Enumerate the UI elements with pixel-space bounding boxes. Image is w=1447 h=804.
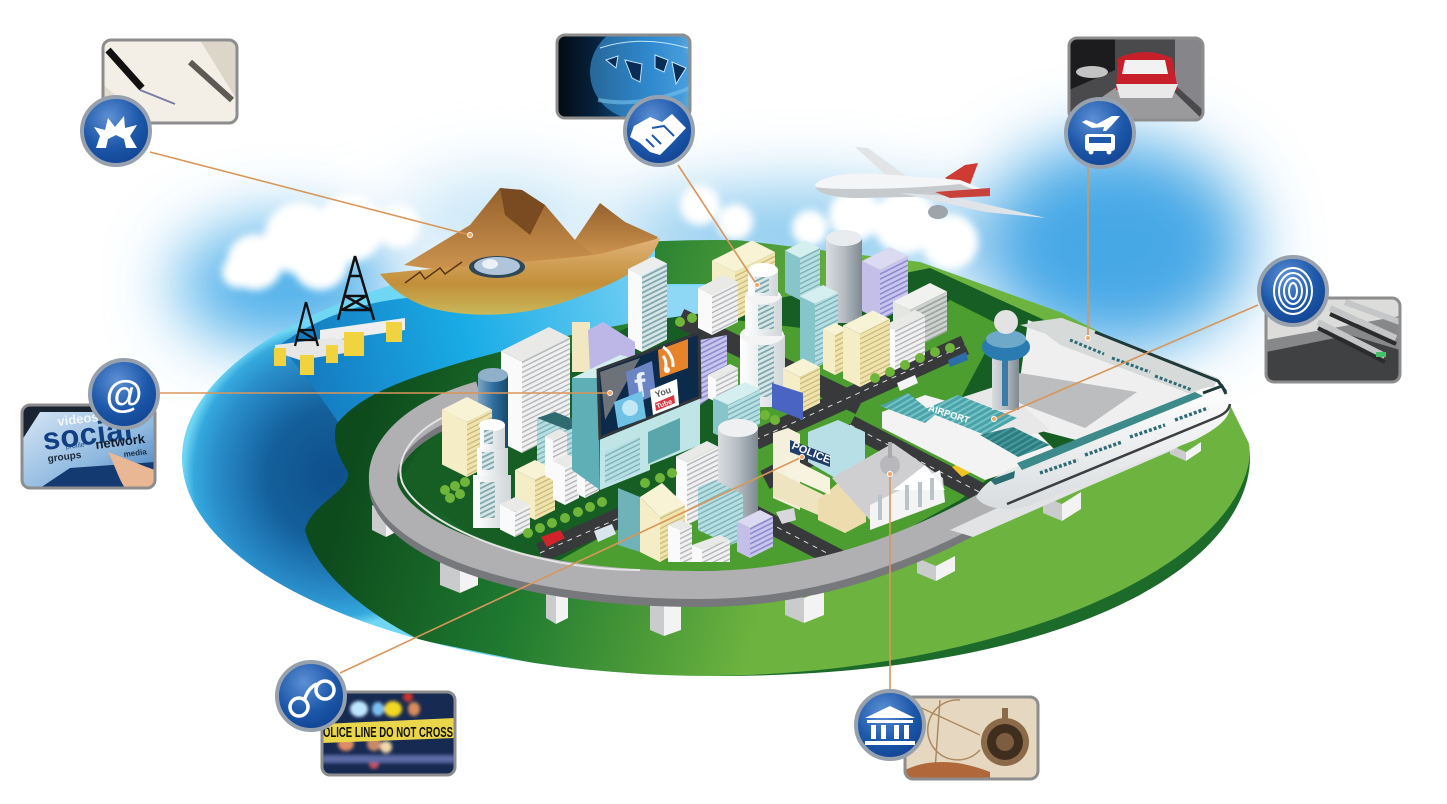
terminal base [882,395,1060,480]
lagoon [281,276,679,422]
connector: social to billboard [160,392,610,394]
thumbnail: compass and clock [905,697,1038,779]
clouds [222,185,978,290]
thumbnail: social network: profile [65,442,85,451]
rear carriages [1030,318,1218,396]
airport and station: AIRPORT [927,403,971,427]
island right rim [716,455,1250,676]
buildings: front block [618,419,773,562]
roads [540,318,985,565]
airport and station [880,310,1220,480]
sky glow behind island [175,140,1250,350]
thumbnail: security gates [1266,298,1400,382]
thumbnail: social network: groups [47,450,82,465]
thumbnail: pen on paper [103,40,237,123]
green landmass [305,240,1250,676]
icon: handshake badge [625,97,693,165]
front body [976,387,1230,509]
thumbnail: police line: OLICE LINE DO NOT CROSS [323,724,453,741]
icon: bank badge [856,691,924,759]
buildings: left block [442,322,635,537]
mountains [380,188,660,315]
icon: explosion badge [82,97,150,165]
icon: handcuffs badge [277,662,345,730]
thumbnail: police line [322,692,455,775]
thumbnail: social network: network [95,431,147,452]
rss tile [658,339,688,378]
cars [541,352,975,547]
twitter tile [614,391,646,428]
lagoon stream [667,285,704,318]
thumbnail: social network: media [123,447,148,459]
thumbnail: social network: social [41,411,134,457]
youtube tile [650,379,679,415]
connector: handcuffs to police [340,457,802,673]
elevated ring road [383,395,1010,593]
connector: handshake to tower [678,165,757,285]
train viaduct underside [950,408,1228,537]
police station: POLICE [790,440,832,466]
icon: at sign badge: @ [105,374,143,416]
museum [832,442,945,530]
city ground [400,268,1190,578]
bullet train [976,318,1230,509]
icon: fingerprint badge [1259,257,1327,325]
small blocks near crossing [700,335,820,440]
billboard building [572,333,700,490]
stacked white tower [740,263,785,407]
youtube tile: Tube [656,398,673,411]
connector: transport to train [1087,165,1089,338]
island disc [182,240,1250,676]
trees [440,313,955,538]
connector: museum [889,474,891,690]
airplane [815,147,1046,219]
control tower [982,310,1030,410]
elevated road pillars [372,442,1201,636]
crater [469,256,525,278]
icon: plane and bus badge [1066,99,1134,167]
facebook tile: f [632,366,649,406]
youtube tile: You [654,385,672,400]
thumbnail: train [1069,38,1203,120]
billboard with social logos [598,333,700,438]
station floor [985,320,1220,445]
thumbnail: social network [22,405,155,488]
thumbnail: social network: videos [57,409,99,429]
oil rigs [274,256,405,375]
thumbnail: globe [557,24,690,120]
icon: at sign badge [90,360,158,428]
connector: pen to mountain [150,152,470,235]
police station [773,420,866,533]
sandy shore [380,238,660,315]
terminal roofs [880,393,935,423]
buildings: back row [628,230,947,387]
connector dots [468,232,1090,476]
connector: fingerprint to airport [994,305,1258,419]
